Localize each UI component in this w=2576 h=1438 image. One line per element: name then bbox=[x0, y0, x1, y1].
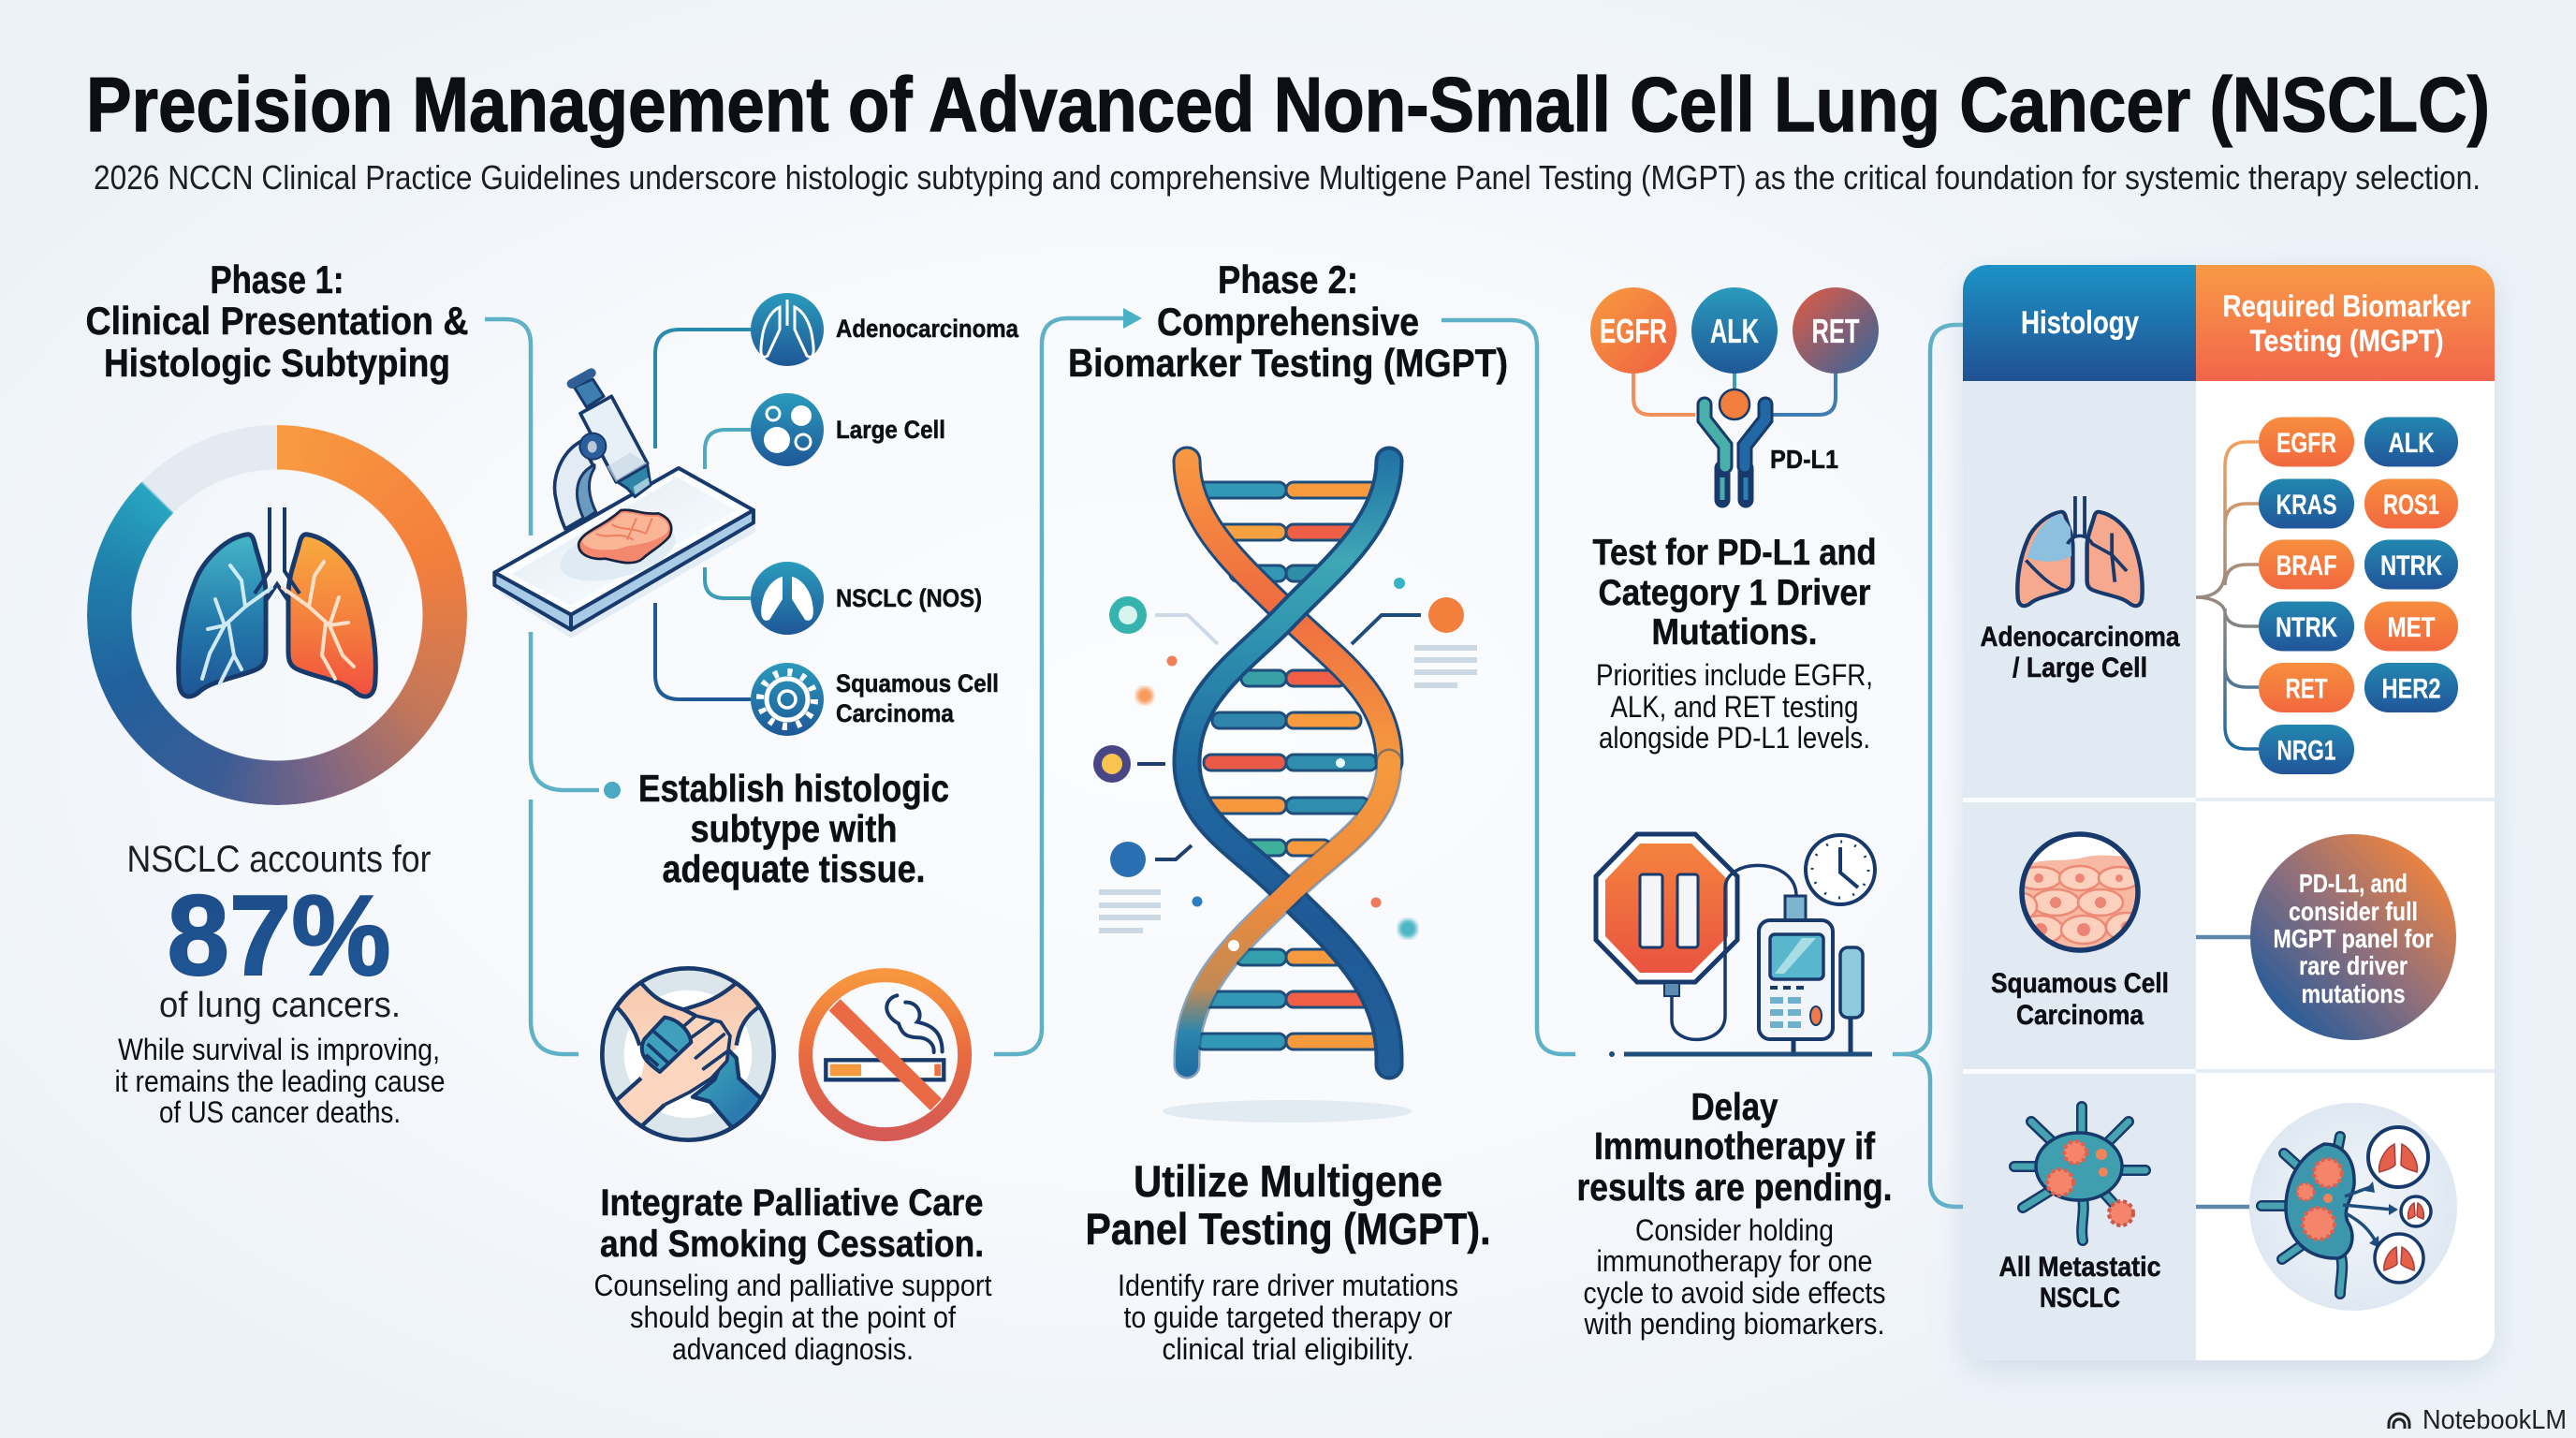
text: palliative care: Counseling and palliative support bbox=[593, 1269, 992, 1302]
icon: biomarkers and PD-L1 receptor: ALK bbox=[1710, 312, 1759, 350]
biomarker pills: ALK bbox=[2389, 428, 2435, 459]
text: PD-L1 testing: Priorities include EGFR, bbox=[1596, 658, 1873, 692]
table header: Required Biomarker bbox=[2222, 289, 2471, 323]
icon: no smoking bbox=[806, 976, 965, 1135]
biomarker pills: NTRK bbox=[2380, 550, 2442, 581]
icon: biomarkers and PD-L1 receptor: EGFR bbox=[1600, 312, 1667, 350]
text: utilize MGPT: to guide targeted therapy or bbox=[1123, 1300, 1453, 1334]
item: Large Cell: Large Cell bbox=[836, 416, 945, 444]
donut chart: 87% ring bbox=[87, 425, 467, 805]
heading: phase 1: Clinical Presentation & bbox=[86, 299, 468, 343]
text: delay immunotherapy: Delay bbox=[1690, 1085, 1778, 1128]
row 3: all metastatic NSCLC bbox=[1999, 1103, 2457, 1313]
row 1: adenocarcinoma / large cell: Adenocarcinoma bbox=[1981, 622, 2180, 653]
text: PD-L1 testing: Mutations. bbox=[1651, 612, 1818, 653]
text: palliative care: Integrate Palliative Care bbox=[601, 1182, 983, 1224]
icon: biomarkers and PD-L1 receptor: PD-L1 bbox=[1770, 445, 1838, 474]
text: delay immunotherapy: with pending biomarkers. bbox=[1584, 1307, 1885, 1341]
heading: phase 2: Biomarker Testing (MGPT) bbox=[1068, 341, 1508, 385]
row 1: adenocarcinoma / large cell bbox=[1981, 418, 2458, 774]
heading: phase 2 bbox=[1068, 257, 1508, 385]
text: utilize MGPT bbox=[1086, 1156, 1490, 1366]
text: survival note: of US cancer deaths. bbox=[159, 1095, 401, 1129]
row 2: squamous cell carcinoma: PD-L1, and bbox=[2299, 869, 2408, 898]
item: Squamous Cell Carcinoma: Carcinoma bbox=[836, 699, 955, 727]
connectors: subtype branches bbox=[655, 330, 751, 699]
biomarker pills: NRG1 bbox=[2276, 736, 2336, 766]
biomarker pills: KRAS bbox=[2276, 490, 2336, 521]
brand: NotebookLM: NotebookLM bbox=[2422, 1405, 2567, 1435]
biomarker pills: HER2 bbox=[2381, 674, 2441, 704]
biomarker pills: RET bbox=[2286, 674, 2327, 704]
text: delay immunotherapy: results are pending. bbox=[1576, 1166, 1893, 1209]
row 2: squamous cell carcinoma bbox=[1991, 833, 2456, 1040]
item: Squamous Cell Carcinoma bbox=[751, 663, 999, 736]
text: delay immunotherapy: Immunotherapy if bbox=[1594, 1124, 1875, 1167]
row 3: all metastatic NSCLC: NSCLC bbox=[2040, 1283, 2120, 1313]
text: palliative care bbox=[593, 1182, 992, 1366]
biomarker pills: BRAF bbox=[2276, 550, 2336, 581]
text: establish subtype: Establish histologic bbox=[638, 767, 949, 810]
text: survival note: it remains the leading cause bbox=[114, 1064, 446, 1098]
text: survival note bbox=[114, 1033, 446, 1129]
item: NSCLC NOS bbox=[751, 562, 982, 635]
text: delay immunotherapy bbox=[1576, 1085, 1893, 1341]
text: utilize MGPT: Panel Testing (MGPT). bbox=[1086, 1204, 1490, 1254]
heading: phase 2: Comprehensive bbox=[1157, 300, 1419, 344]
icon: floating gene markers bbox=[1093, 578, 1477, 938]
table header: Testing (MGPT) bbox=[2250, 324, 2443, 358]
row 2: squamous cell carcinoma: Carcinoma bbox=[2016, 1000, 2144, 1031]
text: palliative care: advanced diagnosis. bbox=[672, 1332, 914, 1366]
heading: phase 1: Histologic Subtyping bbox=[104, 341, 450, 385]
text: palliative care: should begin at the point of bbox=[630, 1300, 956, 1334]
heading: phase 1: Phase 1: bbox=[210, 257, 344, 301]
row 2: squamous cell carcinoma: mutations bbox=[2301, 979, 2406, 1008]
text: utilize MGPT: Utilize Multigene bbox=[1134, 1156, 1442, 1206]
text: delay immunotherapy: cycle to avoid side effects bbox=[1584, 1276, 1885, 1310]
connector: to phase 2 bbox=[994, 308, 1963, 1207]
text: PD-L1 testing: Test for PD-L1 and bbox=[1593, 533, 1876, 573]
stat: NSCLC 87 percent bbox=[127, 839, 431, 1025]
table header bbox=[2021, 289, 2471, 358]
row 3: all metastatic NSCLC: All Metastatic bbox=[1999, 1252, 2160, 1283]
row 2: squamous cell carcinoma: consider full bbox=[2289, 897, 2418, 926]
text: survival note: While survival is improving, bbox=[118, 1033, 440, 1066]
text: PD-L1 testing: alongside PD-L1 levels. bbox=[1599, 721, 1870, 755]
connector: phase 1 flow bbox=[485, 319, 621, 1054]
heading: phase 1 bbox=[86, 257, 468, 385]
text: delay immunotherapy: immunotherapy for one bbox=[1597, 1244, 1872, 1278]
biomarker pills bbox=[2259, 418, 2458, 774]
biomarker pills: NTRK bbox=[2276, 612, 2337, 643]
row 2: squamous cell carcinoma: MGPT panel for bbox=[2273, 924, 2434, 953]
icon: biomarkers and PD-L1 receptor: RET bbox=[1812, 312, 1860, 350]
item: Squamous Cell Carcinoma: Squamous Cell bbox=[836, 669, 999, 697]
text: utilize MGPT: clinical trial eligibility. bbox=[1163, 1332, 1413, 1366]
text: PD-L1 testing: Category 1 Driver bbox=[1599, 573, 1870, 613]
item: Adenocarcinoma bbox=[751, 293, 1019, 366]
text: delay immunotherapy: Consider holding bbox=[1635, 1213, 1834, 1247]
text: establish subtype bbox=[638, 767, 949, 890]
text: PD-L1 testing bbox=[1593, 533, 1876, 755]
icon: supportive hands bbox=[602, 968, 774, 1140]
biomarker pills: EGFR bbox=[2276, 428, 2336, 459]
row 2: squamous cell carcinoma: Squamous Cell bbox=[1991, 968, 2169, 999]
biomarker pills: MET bbox=[2387, 612, 2436, 643]
row 1: adenocarcinoma / large cell: / Large Cell bbox=[2012, 653, 2147, 683]
item: Large Cell bbox=[751, 393, 945, 466]
table header: Histology bbox=[2021, 305, 2139, 341]
stat: NSCLC 87 percent: NSCLC accounts for bbox=[127, 839, 431, 880]
stat: NSCLC 87 percent: of lung cancers. bbox=[159, 986, 401, 1025]
icon: microscope and slide bbox=[494, 373, 755, 638]
heading: phase 2: Phase 2: bbox=[1218, 257, 1358, 301]
icon: stop sign, infusion pump and clock bbox=[1596, 834, 1875, 1057]
text: establish subtype: subtype with bbox=[691, 807, 897, 850]
panel: histology and biomarker table bbox=[1963, 265, 2495, 1360]
icon: biomarkers and PD-L1 receptor bbox=[1590, 287, 1879, 500]
text: utilize MGPT: Identify rare driver mutations bbox=[1118, 1269, 1458, 1302]
text: establish subtype: adequate tissue. bbox=[663, 847, 925, 890]
row 2: squamous cell carcinoma: rare driver bbox=[2299, 951, 2408, 980]
icon: lungs in donut bbox=[179, 507, 375, 697]
text: PD-L1 testing: ALK, and RET testing bbox=[1610, 690, 1859, 724]
item: NSCLC NOS: NSCLC (NOS) bbox=[836, 584, 982, 612]
stat: NSCLC 87 percent: 87% bbox=[167, 872, 391, 999]
text: palliative care: and Smoking Cessation. bbox=[600, 1224, 984, 1265]
item: Adenocarcinoma: Adenocarcinoma bbox=[836, 315, 1019, 343]
icon: DNA double helix bbox=[1163, 461, 1412, 1123]
biomarker pills: ROS1 bbox=[2383, 490, 2439, 521]
